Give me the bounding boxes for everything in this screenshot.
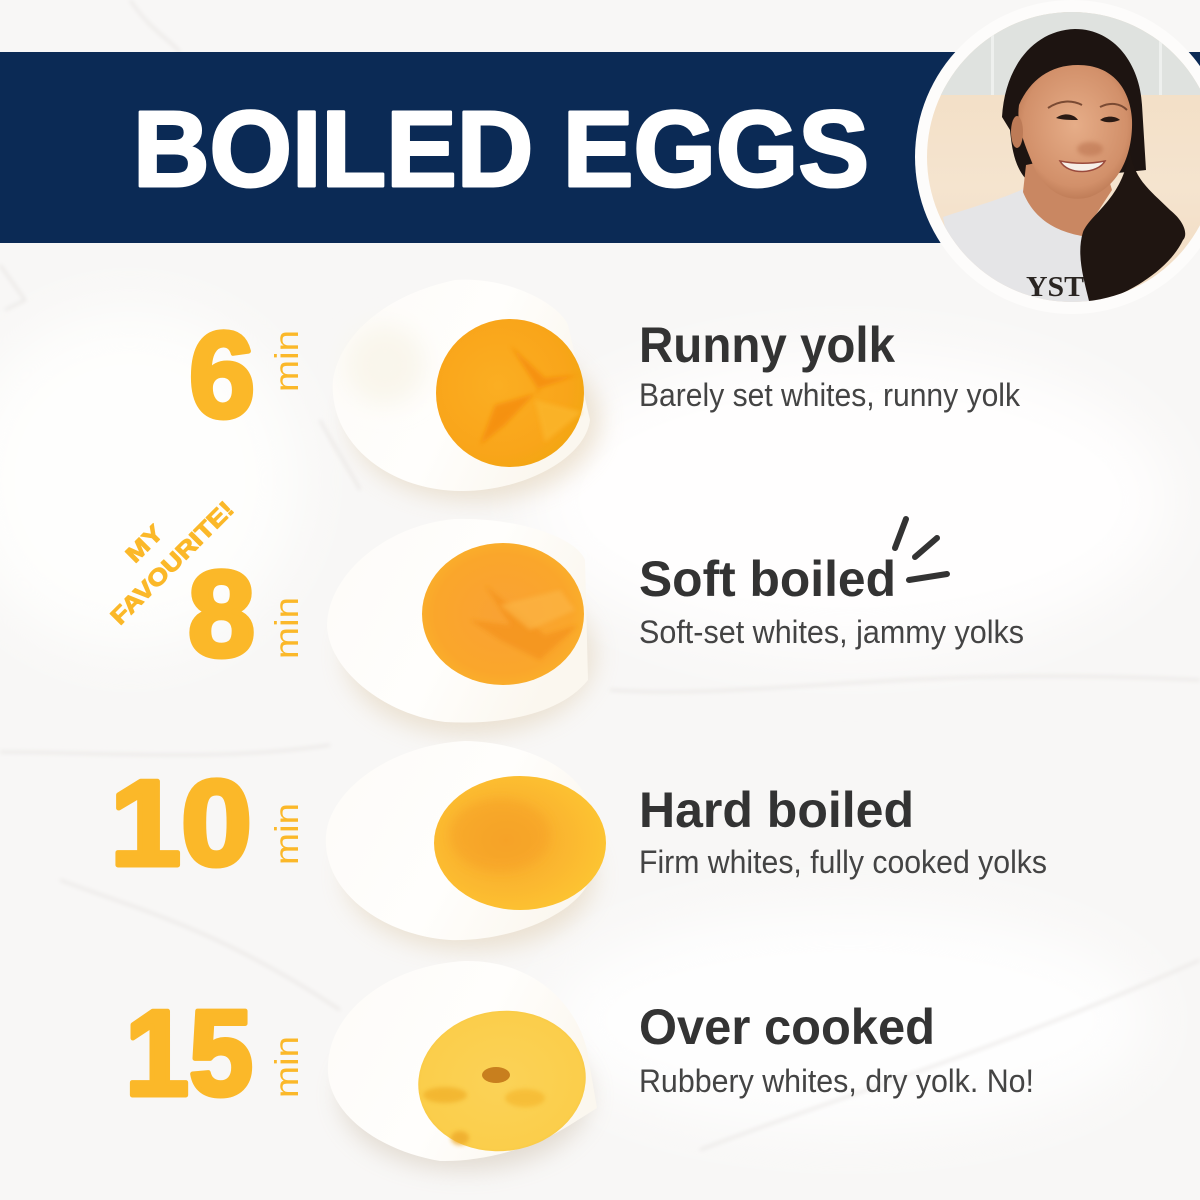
description: Barely set whites, runny yolk bbox=[639, 377, 1021, 413]
label: soft boiled bbox=[639, 551, 1024, 650]
time: 6 min bbox=[189, 307, 305, 443]
time: 8 min bbox=[188, 546, 305, 682]
title banner bbox=[0, 52, 1200, 243]
label: hard boiled bbox=[639, 782, 1047, 880]
smile bbox=[1060, 161, 1105, 172]
hair back bbox=[1002, 29, 1146, 183]
egg: 10 minutes bbox=[326, 741, 609, 950]
title: BOILED EGGS bbox=[133, 88, 869, 209]
label: hard boiled: Hard boiled bbox=[639, 782, 914, 838]
description: Rubbery whites, dry yolk. No! bbox=[639, 1063, 1034, 1099]
min label: min bbox=[268, 330, 305, 392]
min label: min bbox=[268, 597, 305, 659]
label: runny yolk bbox=[639, 317, 1021, 413]
time: 15 min: 15 bbox=[125, 985, 253, 1121]
shirt bbox=[943, 189, 1089, 302]
label: over cooked bbox=[639, 999, 1034, 1099]
label: over cooked: Over cooked bbox=[639, 999, 935, 1055]
time: 10 min: 10 bbox=[110, 755, 252, 891]
my favourite note: MY bbox=[120, 519, 168, 568]
yolk bbox=[409, 1000, 595, 1162]
description: Soft-set whites, jammy yolks bbox=[639, 614, 1024, 650]
time: 6 min: 6 bbox=[189, 307, 255, 443]
label: soft boiled: Soft boiled bbox=[639, 551, 896, 607]
yolk bbox=[436, 319, 584, 467]
min label: min bbox=[268, 803, 305, 865]
egg: 6 minutes bbox=[333, 280, 600, 500]
min label: min bbox=[268, 1036, 305, 1098]
label: runny yolk: Runny yolk bbox=[639, 317, 895, 373]
description: Firm whites, fully cooked yolks bbox=[639, 844, 1047, 880]
portrait photo bbox=[915, 0, 1200, 314]
time: 10 min bbox=[110, 755, 305, 891]
eyes bbox=[1056, 114, 1078, 120]
ponytail bbox=[1080, 171, 1186, 301]
face bbox=[1018, 65, 1132, 199]
neck bbox=[1023, 164, 1112, 236]
egg: 8 minutes bbox=[327, 519, 595, 735]
my favourite note: FAVOURITE! bbox=[105, 496, 239, 630]
ear bbox=[1011, 116, 1023, 148]
egg: 15 minutes bbox=[328, 961, 597, 1170]
nose shadow bbox=[1077, 142, 1103, 156]
shirt print: YST bbox=[1026, 271, 1084, 303]
yolk bbox=[434, 776, 606, 910]
time: 8 min: 8 bbox=[188, 546, 255, 682]
eyebrows bbox=[1048, 102, 1127, 110]
yolk bbox=[422, 543, 584, 685]
icon: emphasis strokes bbox=[895, 519, 947, 580]
